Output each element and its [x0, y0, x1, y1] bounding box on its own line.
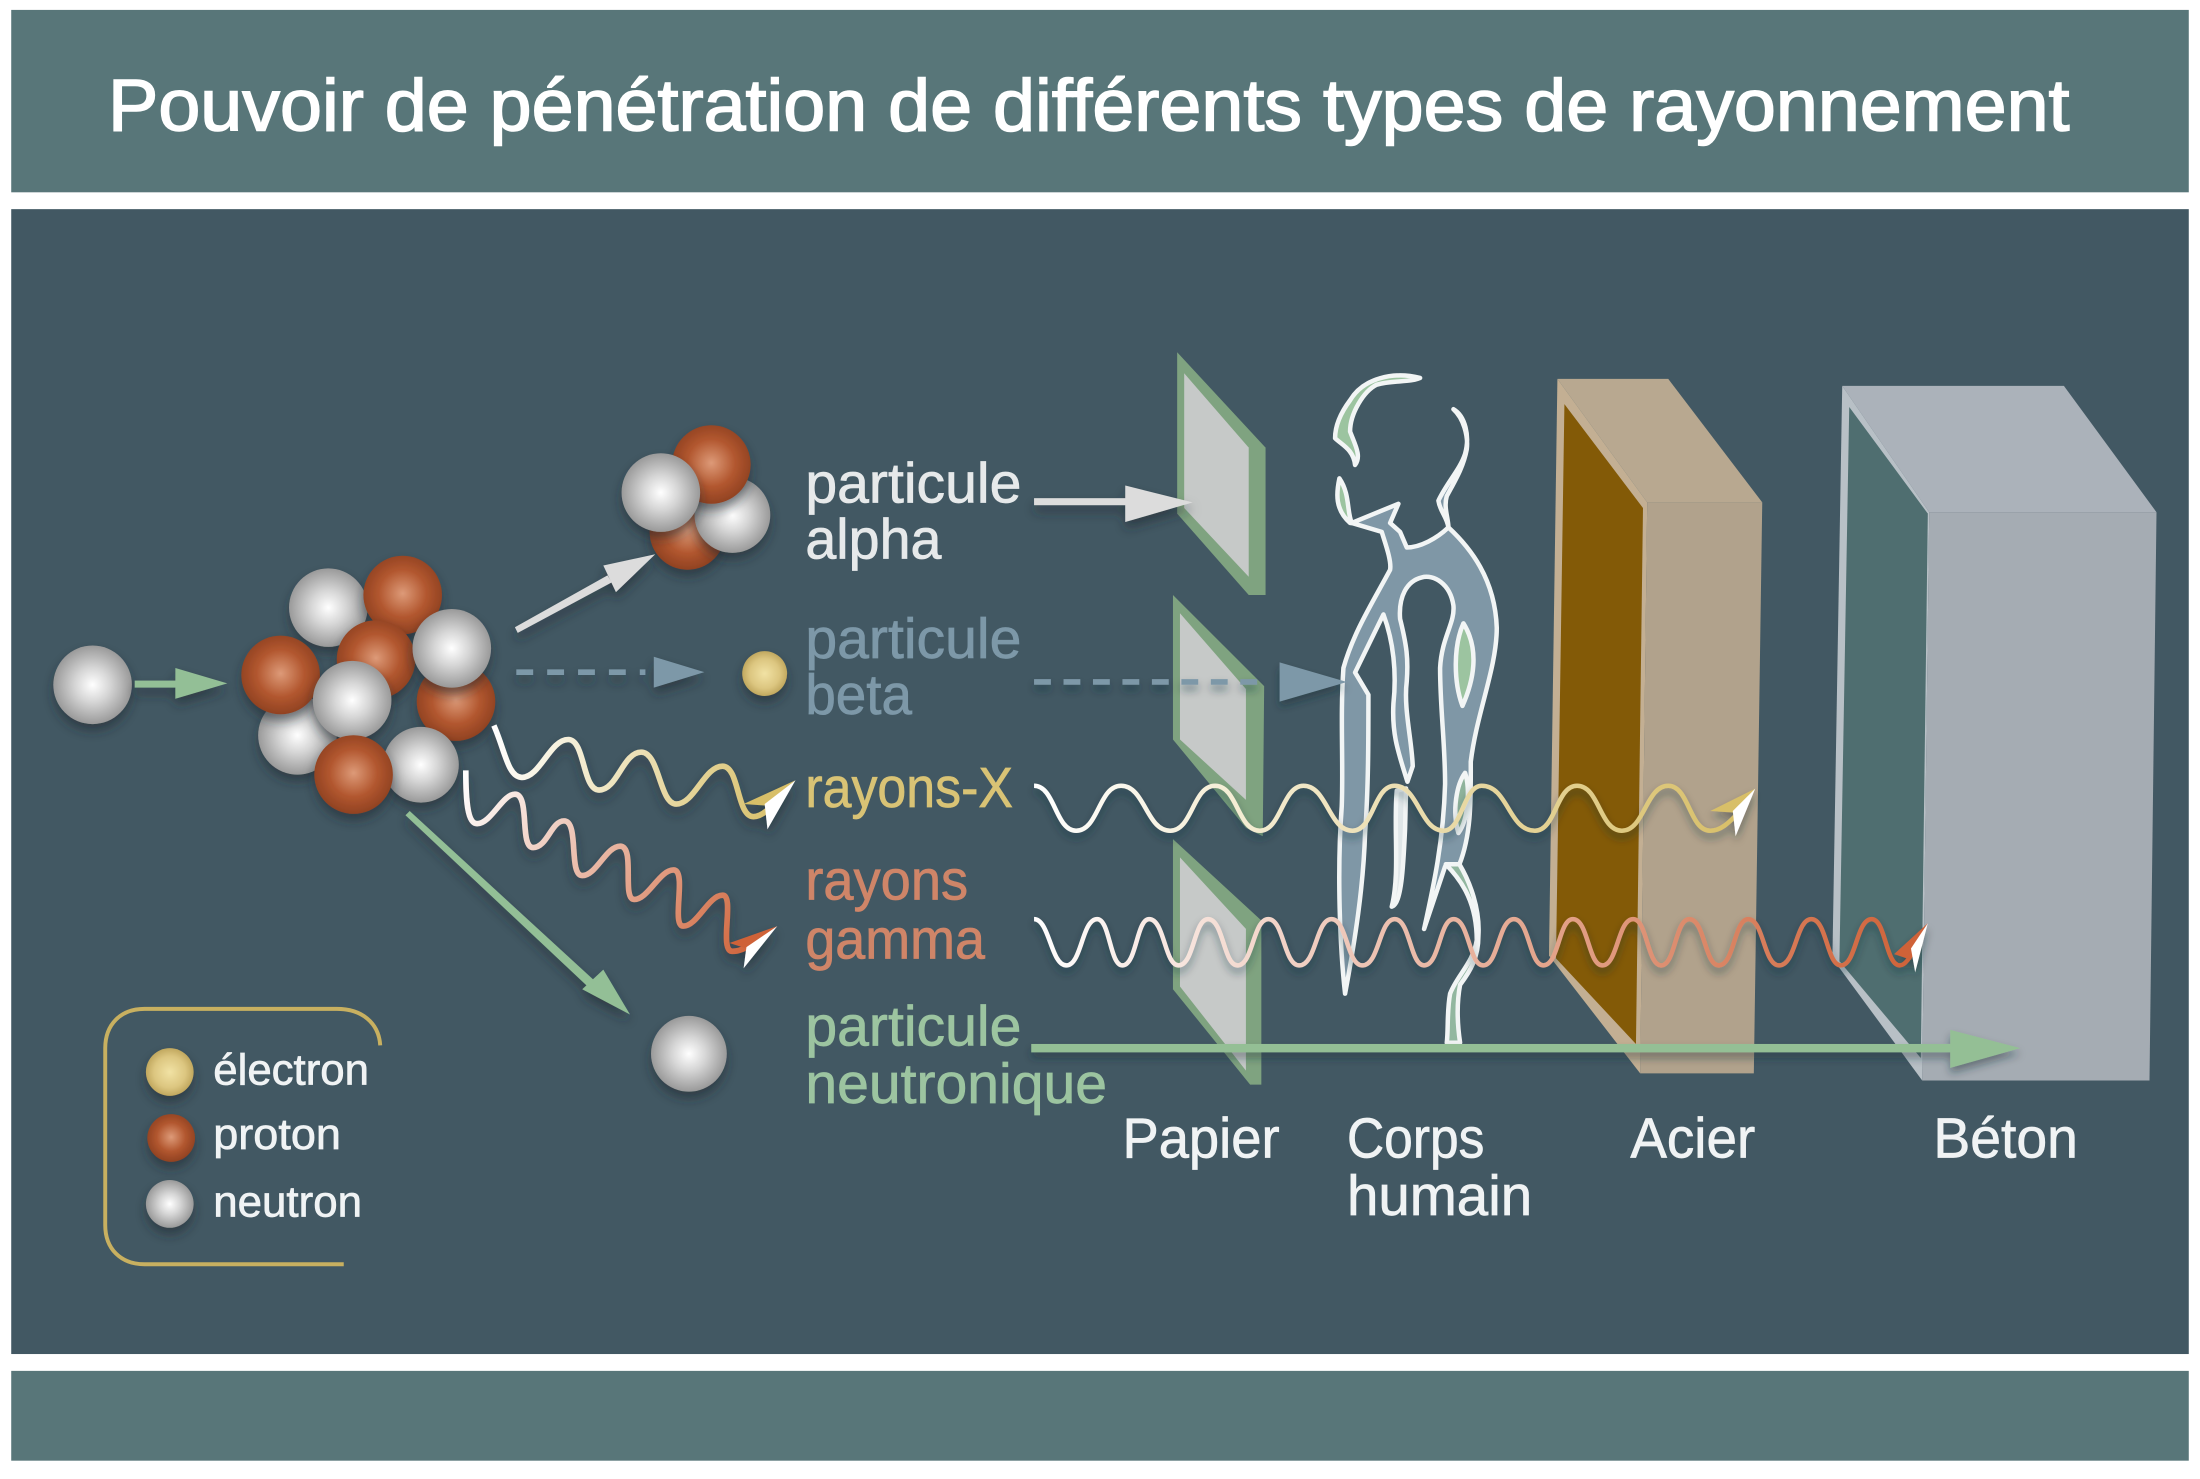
alpha particle: [622, 425, 770, 570]
panel: paper sheets: [1173, 352, 1266, 1085]
label: Corps humain: [1347, 1107, 1532, 1227]
label: particule neutronique: particule: [805, 994, 1021, 1057]
label: particule alpha: alpha: [805, 508, 942, 571]
label: Papier: Papier: [1122, 1107, 1280, 1170]
panel: steel block: [1549, 379, 1762, 1073]
label: Corps humain: humain: [1347, 1164, 1532, 1227]
arrow: to beta particle: [516, 657, 704, 688]
wave: X rays from nucleus: [494, 725, 796, 829]
label: particule beta: [805, 607, 1021, 726]
label: Acier: Acier: [1630, 1107, 1755, 1170]
legend item: neutron: neutron: [213, 1179, 362, 1227]
arrow: to neutron: [405, 811, 630, 1014]
wave: X rays stopped by steel: [1034, 786, 1755, 836]
label: rayons-X: rayons-X: [805, 756, 1013, 819]
wave: gamma rays from nucleus: [466, 770, 777, 968]
label: particule alpha: particule: [805, 451, 1021, 514]
label: Corps humain: Corps: [1347, 1107, 1484, 1170]
arrow: to alpha particle: [515, 554, 655, 633]
legend: [105, 1009, 380, 1264]
electron beta: [742, 651, 787, 696]
label: rayons gamma: rayons: [805, 848, 968, 911]
label: particule beta: particule: [805, 607, 1021, 670]
label: rayons gamma: [805, 848, 986, 970]
icon: human body: [1335, 375, 1497, 1043]
arrow: alpha stopped by paper: [1034, 486, 1193, 522]
arrow: neutron passes to concrete: [1031, 1030, 2020, 1068]
legend item: proton: [147, 1111, 341, 1162]
legend frame: [105, 1009, 380, 1264]
label: particule alpha: [805, 451, 1021, 571]
arrow: incoming neutron: [135, 668, 227, 699]
legend item: neutron: [146, 1179, 362, 1228]
title: Pouvoir de pénétration de différents types de rayonnement: [108, 66, 2070, 147]
label: particule neutronique: neutronique: [805, 1052, 1107, 1115]
nucleus cluster: [241, 556, 495, 814]
incoming neutron: [53, 645, 132, 724]
neutron: [651, 1016, 727, 1092]
legend item: proton: proton: [213, 1111, 341, 1159]
legend item: électron: électron: [213, 1047, 369, 1095]
label: particule neutronique: [805, 994, 1107, 1115]
label: rayons gamma: gamma: [805, 907, 986, 970]
arrow: beta stopped by body: [1034, 662, 1347, 702]
label: Béton: Béton: [1933, 1107, 2078, 1170]
panel: concrete block: [1832, 386, 2157, 1080]
legend item: électron: [146, 1047, 369, 1096]
wave: gamma rays stopped by concrete: [1034, 919, 1928, 972]
label: particule beta: beta: [805, 663, 913, 726]
